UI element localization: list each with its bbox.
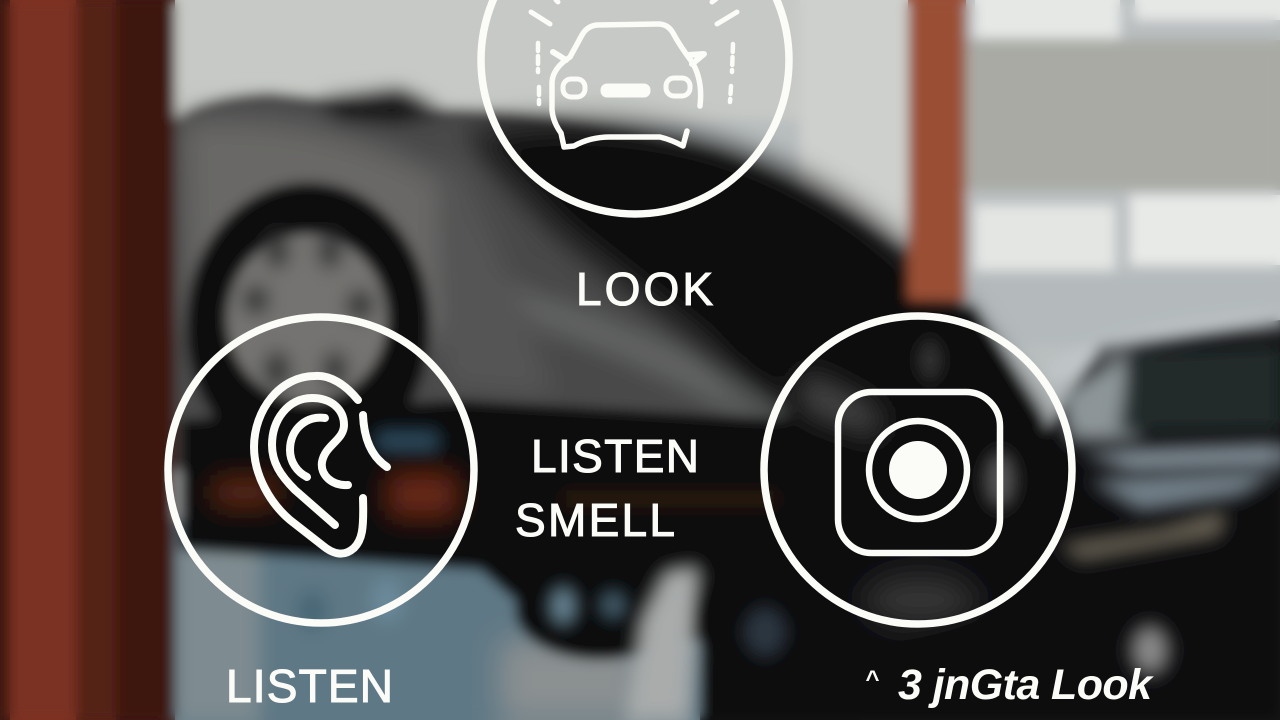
label: LISTEN bottom left: LISTEN: [226, 660, 393, 712]
label: SMELL center: SMELL: [515, 494, 675, 546]
caption: bottom right: ^: [865, 666, 879, 693]
caption: bottom right: 3 jnGta Look: [898, 661, 1154, 709]
icon: car front: [531, 0, 737, 147]
smell circle with square icon: [764, 316, 1072, 624]
listen circle with ear icon: [168, 317, 474, 623]
look circle with car icon: [481, 0, 789, 214]
label: LISTEN center: LISTEN: [531, 430, 699, 482]
icon: ear: [254, 376, 387, 554]
label: LOOK: LOOK: [576, 263, 713, 315]
icon: rounded square with ring and dot: [838, 392, 1000, 553]
